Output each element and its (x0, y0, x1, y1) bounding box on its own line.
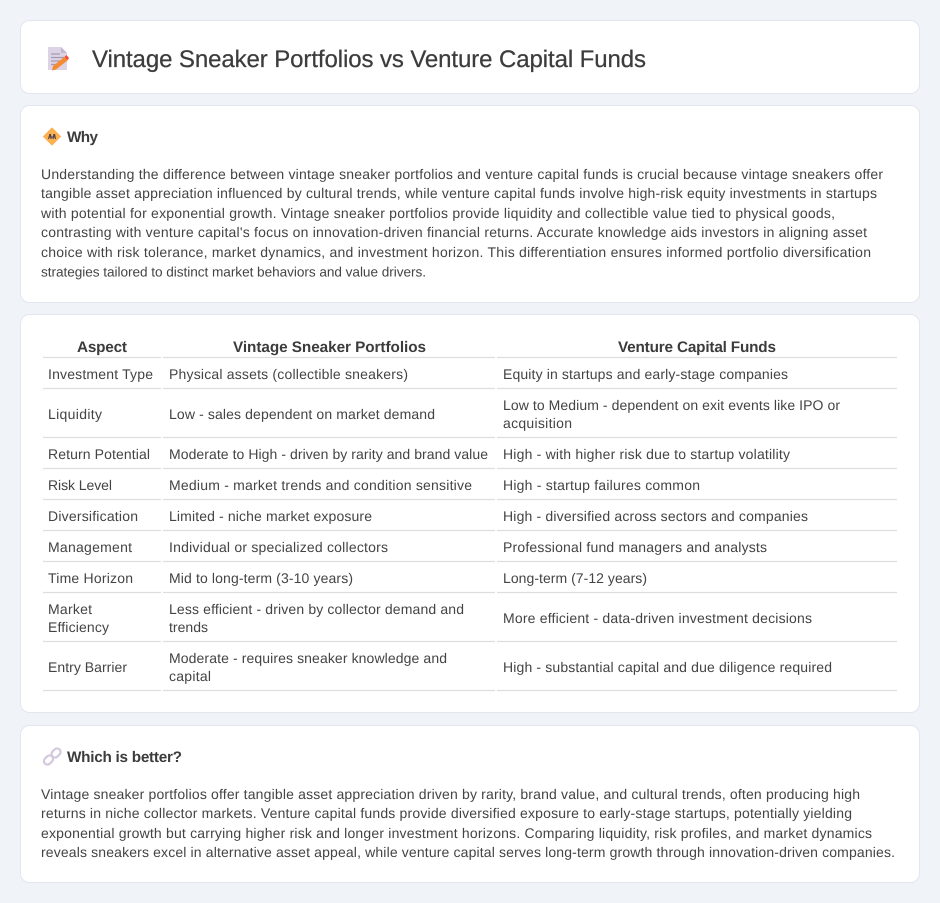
icon: document with pencil (48, 47, 69, 70)
icon: chain link (42, 747, 62, 766)
table header row: Aspect (77, 339, 127, 356)
row: entry barrier: Entry Barrier (48, 659, 127, 675)
text block: verdict: returns in niche collector markets. Venture capital funds provide diversified exposure to early-stage startups, potentially yielding (41, 805, 852, 821)
row: market efficiency: Efficiency (48, 619, 109, 635)
title: Vintage Sneaker Portfolios vs Venture Capital Funds (92, 46, 646, 73)
row: liquidity: acquisition (503, 415, 572, 431)
row: liquidity: Low to Medium - dependent on exit events like IPO or (503, 397, 840, 413)
row: risk level (43, 477, 897, 500)
text block: why explanation: choice with risk tolerance, market dynamics, and investment horizon. This differentiation ensures informed portfolio diversification (41, 244, 871, 260)
table header row: Venture Capital Funds (618, 339, 776, 356)
row: diversification: High - diversified across sectors and companies (503, 508, 808, 524)
row: diversification (43, 508, 897, 530)
row: diversification: Diversification (48, 508, 138, 524)
row: diversification: Limited - niche market exposure (169, 508, 372, 524)
row: time horizon: Long-term (7-12 years) (503, 570, 647, 586)
table header row (43, 339, 897, 358)
row: return potential: Return Potential (48, 446, 150, 462)
text block: verdict: reveals sneakers excel in alternative asset appeal, while venture capital serves long-term growth through innovation-driven companies. (41, 844, 895, 860)
row: investment type (43, 366, 897, 388)
row: market efficiency: Less efficient - driven by collector demand and (169, 601, 464, 617)
panel: comparison table (20, 314, 920, 712)
row: time horizon: Mid to long-term (3-10 years) (169, 570, 353, 586)
panel: title header (20, 20, 920, 94)
row: entry barrier: capital (169, 668, 211, 684)
text block: why explanation: with potential for exponential growth. Vintage sneaker portfolios provide liquidity and collectible value tied to physical goods, (40, 205, 835, 221)
row: return potential: High - with higher risk due to startup volatility (503, 446, 790, 462)
row: management: Management (48, 539, 132, 555)
text block: why explanation: contrasting with venture capital's focus on innovation-driven financial returns. Accurate knowledge aids investors in aligning asset (41, 224, 867, 240)
row: market efficiency: More efficient - data-driven investment decisions (503, 610, 812, 626)
row: management: Individual or specialized collectors (169, 539, 388, 555)
row: investment type: Physical assets (collectible sneakers) (169, 366, 408, 382)
row: entry barrier (43, 650, 897, 690)
row: entry barrier: High - substantial capital and due diligence required (503, 659, 832, 675)
text block: verdict: exponential growth but carrying higher risk and longer investment horizons. Comparing liquidity, risk profiles, and market dynamics (41, 825, 872, 841)
heading: which is better: Which is better? (67, 749, 182, 766)
row: market efficiency (43, 601, 897, 642)
row: return potential (43, 446, 897, 468)
text block: why explanation (40, 166, 883, 280)
row: management (43, 539, 897, 562)
heading: why: Why (67, 129, 98, 146)
text block: why explanation: tangible asset appreciation influenced by cultural trends, while venture capital funds involve high-risk equity investments in startups (41, 185, 877, 201)
text block: why explanation: Understanding the difference between vintage sneaker portfolios and venture capital funds is crucial because vintage sneakers offer (41, 166, 883, 182)
text block: why explanation: strategies tailored to distinct market behaviors and value drivers. (41, 264, 426, 280)
row: liquidity: Liquidity (48, 406, 102, 422)
row: liquidity: Low - sales dependent on market demand (169, 406, 435, 422)
text block: verdict (41, 786, 895, 860)
row: time horizon: Time Horizon (48, 570, 133, 586)
panel: which is better (20, 726, 920, 882)
row: liquidity (43, 397, 897, 438)
icon: warning diamond (44, 128, 60, 145)
row: risk level: High - startup failures common (503, 477, 700, 493)
row: management: Professional fund managers and analysts (503, 539, 767, 555)
row: risk level: Risk Level (48, 477, 112, 493)
row: risk level: Medium - market trends and condition sensitive (169, 477, 472, 493)
row: time horizon (43, 570, 897, 592)
panel: why (20, 106, 920, 302)
row: return potential: Moderate to High - driven by rarity and brand value (169, 446, 488, 462)
row: market efficiency: Market (48, 601, 92, 617)
row: market efficiency: trends (169, 619, 208, 635)
row: entry barrier: Moderate - requires sneaker knowledge and (169, 650, 447, 666)
table header row: Vintage Sneaker Portfolios (233, 339, 426, 356)
text block: verdict: Vintage sneaker portfolios offer tangible asset appreciation driven by rarity, brand value, and cultural trends, often producing high (41, 786, 860, 802)
row: investment type: Investment Type (48, 366, 153, 382)
row: investment type: Equity in startups and early-stage companies (503, 366, 788, 382)
